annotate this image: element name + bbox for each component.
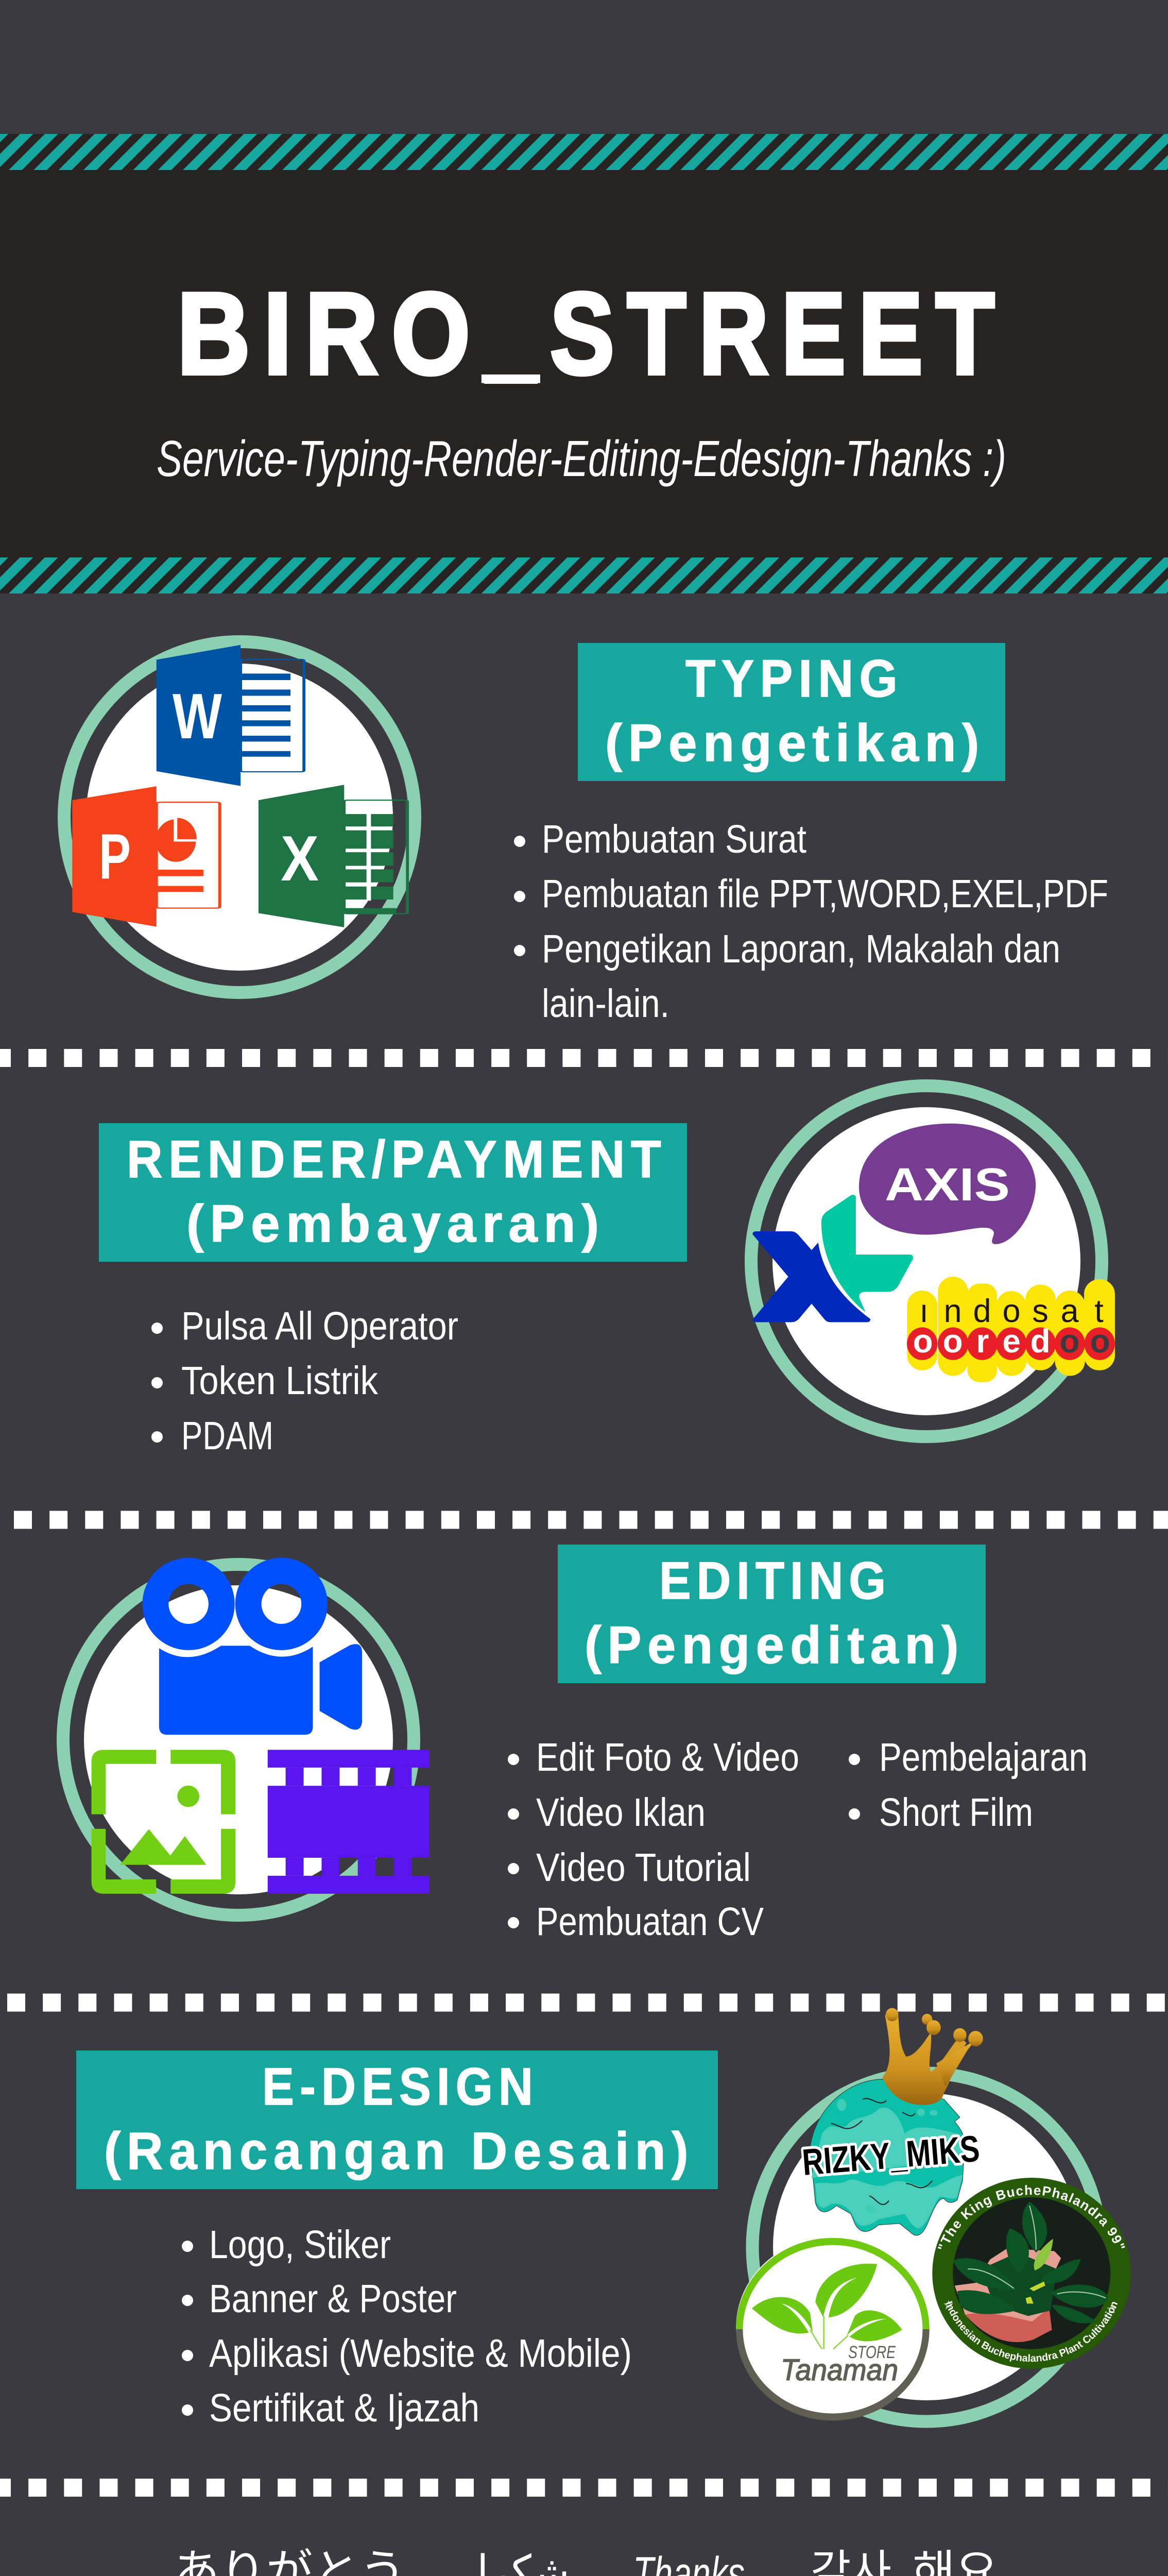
icon: picture frame	[92, 1750, 235, 1894]
icon: axis logo	[859, 1124, 1036, 1244]
icon: indosat ooredoo logo: o	[942, 1323, 963, 1360]
icon: powerpoint	[72, 786, 220, 927]
heading: typing: TYPING	[685, 649, 903, 708]
title: STREET	[550, 268, 1007, 398]
title: _	[483, 262, 539, 392]
icon: indosat ooredoo logo: a	[1060, 1293, 1079, 1329]
bullet list: design: Aplikasi (Website & Mobile)	[209, 2331, 632, 2376]
heading: e-design: E-DESIGN	[262, 2057, 539, 2116]
bullet list: payment: PDAM	[181, 1414, 273, 1458]
icon: indosat ooredoo logo: n	[943, 1293, 962, 1329]
bullet list: typing: Pengetikan Laporan, Makalah dan	[542, 927, 1060, 971]
icon: design badge circle	[752, 2073, 1101, 2421]
icon: indosat ooredoo logo: r	[976, 1323, 989, 1360]
title	[177, 262, 1007, 398]
icon: buchephalandra badge: Indonesian Buchephalandra Plant Cultivation	[946, 2301, 1118, 2362]
icon: excel	[259, 785, 407, 927]
panel: editing service	[63, 1545, 1088, 1944]
bullet list: editing	[508, 1735, 1088, 1944]
heading: render payment: (Pembayaran)	[186, 1194, 605, 1253]
icon: tanaman store badge: Tanaman	[781, 2353, 898, 2387]
bullet list: payment: Pulsa All Operator	[181, 1304, 458, 1348]
icon: tanaman store badge	[736, 2237, 930, 2418]
icon: axis logo: AXIS	[885, 1159, 1010, 1211]
bullet list: editing: Pembelajaran	[879, 1735, 1088, 1780]
heading: editing: EDITING	[659, 1551, 891, 1610]
icon: word	[157, 645, 304, 786]
icon: indosat ooredoo logo: o	[1059, 1323, 1080, 1360]
bullet list: design: Sertifikat & Ijazah	[209, 2386, 479, 2430]
bullet list: editing: Short Film	[879, 1790, 1033, 1835]
bullet list: design: Banner & Poster	[209, 2277, 457, 2321]
icon: film strip	[268, 1750, 430, 1894]
panel: typing service	[64, 642, 1108, 1026]
panel: thank you messages	[173, 2546, 998, 2576]
icon: indosat ooredoo logo: e	[1002, 1323, 1021, 1360]
icon: tanaman store badge: STORE	[848, 2343, 896, 2362]
icon: indosat ooredoo logo: ı	[919, 1293, 929, 1329]
heading: typing	[578, 643, 1005, 781]
text: multilingual thanks	[173, 2546, 998, 2576]
title: BIRO	[177, 268, 484, 398]
heading: typing: (Pengetikan)	[605, 714, 985, 772]
heading: render payment	[99, 1123, 687, 1262]
icon: indosat ooredoo logo: s	[1032, 1293, 1049, 1329]
icon: editing badge circle	[63, 1564, 414, 1916]
icon: indosat ooredoo logo: d	[1030, 1323, 1051, 1360]
label: rizky miks: RIZKY_MIKS	[801, 2128, 981, 2183]
panel: render payment service	[99, 1086, 1115, 1458]
bullet list: design	[182, 2223, 632, 2430]
bullet list: payment	[151, 1304, 458, 1458]
bullet list: design: Logo, Stiker	[209, 2223, 391, 2267]
icon: excel: X	[281, 823, 319, 894]
icon: buchephalandra badge	[932, 2178, 1131, 2369]
icon: buchephalandra badge: ☆	[1106, 2302, 1118, 2316]
bullet list: editing: Video Iklan	[536, 1790, 706, 1835]
icon: buchephalandra badge: ☆	[943, 2298, 954, 2312]
icon: indosat ooredoo logo	[907, 1277, 1115, 1382]
icon: buchephalandra badge: "The King BuchePhalandra 99"	[938, 2185, 1125, 2249]
heading: editing	[558, 1545, 986, 1683]
heading: e-design: (Rancangan Desain)	[104, 2122, 694, 2180]
icon: crown	[882, 2008, 983, 2105]
bullet list: editing: Video Tutorial	[536, 1845, 751, 1890]
panel: header band	[0, 134, 1168, 594]
bullet list: editing: Pembuatan CV	[536, 1900, 764, 1944]
bullet list: typing: lain-lain.	[542, 981, 669, 1026]
icon: rizky miks slime mascot	[801, 2008, 983, 2235]
icon: powerpoint: P	[99, 821, 131, 892]
icon: indosat ooredoo logo: o	[913, 1323, 933, 1360]
icon: indosat ooredoo logo: d	[973, 1293, 991, 1329]
icon: indosat ooredoo logo: t	[1094, 1293, 1104, 1329]
icon: office badge circle	[64, 642, 415, 992]
heading: editing: (Pengeditan)	[585, 1616, 965, 1674]
panel: e-design service	[76, 2008, 1131, 2430]
heading: e-design	[76, 2050, 718, 2189]
icon: operator badge circle	[751, 1086, 1102, 1436]
icon: video camera	[142, 1558, 362, 1735]
bullet list: payment: Token Listrik	[181, 1359, 378, 1403]
bullet list: editing: Edit Foto & Video	[536, 1735, 799, 1780]
heading: render payment: RENDER/PAYMENT	[127, 1130, 667, 1189]
bullet list: typing: Pembuatan Surat	[542, 817, 806, 861]
bullet list: typing	[514, 817, 1108, 1026]
icon: xl logo	[752, 1195, 913, 1322]
icon: indosat ooredoo logo: o	[1002, 1293, 1021, 1329]
icon: word: W	[173, 681, 222, 752]
icon: indosat ooredoo logo: o	[1090, 1323, 1110, 1360]
